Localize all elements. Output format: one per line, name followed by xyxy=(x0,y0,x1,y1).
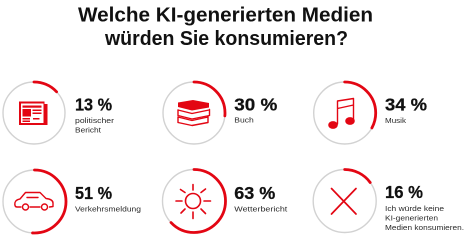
label politischer Bericht: Bericht xyxy=(75,126,102,134)
value 51 %: 51 % xyxy=(75,183,112,203)
value 16 %: 16 % xyxy=(385,182,423,202)
label keine KI-generierten Medien: KI-generierten xyxy=(385,214,438,222)
icon: newspaper xyxy=(19,102,48,125)
panel: Buch 30 % xyxy=(163,82,278,144)
icon: sun xyxy=(176,184,210,218)
panel: politischer Bericht 13 % xyxy=(3,82,115,144)
value 63 %: 63 % xyxy=(234,183,276,203)
label Musik: Musik xyxy=(385,116,406,125)
value 34 %: 34 % xyxy=(385,94,427,114)
icon: car xyxy=(15,192,53,210)
panel: Musik 34 % xyxy=(314,82,427,144)
title: Welche KI-generierten Medien xyxy=(78,4,373,26)
progress ring 13 % xyxy=(3,82,65,144)
progress ring 30 % xyxy=(163,82,225,144)
panel: Wetterbericht 63 % xyxy=(162,170,288,232)
icon: music notes xyxy=(328,98,355,129)
value 30 %: 30 % xyxy=(234,94,278,114)
progress ring 63 % xyxy=(162,170,226,232)
label politischer Bericht: politischer xyxy=(75,116,115,125)
icon: books xyxy=(178,100,210,126)
label keine KI-generierten Medien: Medien konsumieren. xyxy=(385,223,464,232)
label Wetterbericht: Wetterbericht xyxy=(234,204,288,214)
label Verkehrsmeldung: Verkehrsmeldung xyxy=(75,204,141,214)
label politischer Bericht xyxy=(75,116,115,134)
progress ring 16 % xyxy=(313,170,376,232)
panel: keine KI-Medien 16 % xyxy=(313,170,464,232)
value 13 %: 13 % xyxy=(75,94,112,114)
label Buch: Buch xyxy=(234,116,254,124)
panel: Verkehrsmeldung 51 % xyxy=(3,170,141,233)
icon: cross xyxy=(332,188,356,214)
title xyxy=(78,4,373,50)
title: würden Sie konsumieren? xyxy=(104,28,348,50)
label keine KI-generierten Medien: Ich würde keine xyxy=(385,204,444,213)
label keine KI-generierten Medien xyxy=(385,204,464,232)
progress ring 51 % xyxy=(3,170,66,233)
progress ring 34 % xyxy=(314,82,376,144)
